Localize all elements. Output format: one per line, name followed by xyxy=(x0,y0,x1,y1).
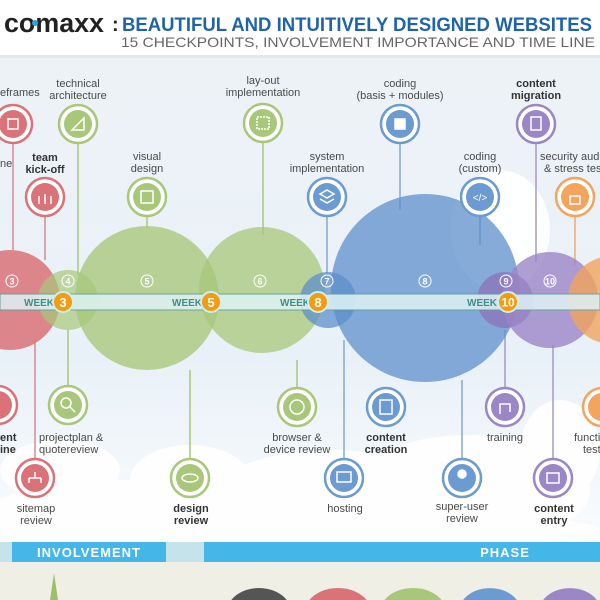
clouds xyxy=(0,170,600,560)
labels: entry xyxy=(541,515,568,527)
labels: coding xyxy=(464,151,496,163)
labels: super-user xyxy=(436,501,489,513)
labels: ne xyxy=(0,158,12,170)
labels: (custom) xyxy=(459,163,501,175)
title: : xyxy=(112,14,119,36)
labels xyxy=(0,75,600,527)
step numbers xyxy=(6,275,556,287)
step numbers: 4 xyxy=(65,276,71,286)
labels: (basis + modules) xyxy=(356,90,444,102)
step numbers: 9 xyxy=(503,276,509,286)
labels: team xyxy=(32,152,58,164)
step numbers: 5 xyxy=(144,276,150,286)
header xyxy=(0,0,600,58)
connector lines xyxy=(13,140,575,462)
labels: review xyxy=(446,513,478,525)
labels: quotereview xyxy=(39,444,98,456)
labels: content xyxy=(366,432,406,444)
labels: browser & xyxy=(272,432,322,444)
week band: WEEK xyxy=(280,298,311,309)
labels: coding xyxy=(384,78,416,90)
labels: review xyxy=(20,515,52,527)
bottom chart xyxy=(0,562,600,600)
labels: lay-out xyxy=(246,75,280,87)
icons xyxy=(0,104,600,497)
step numbers: 10 xyxy=(545,276,555,286)
labels: implementation xyxy=(226,87,300,99)
icons: </> xyxy=(473,193,487,204)
step numbers: 7 xyxy=(324,276,330,286)
labels: ent xyxy=(0,432,17,444)
labels: creation xyxy=(365,444,408,456)
labels: ine xyxy=(0,444,16,456)
labels: kick-off xyxy=(25,164,65,176)
logo: comaxx xyxy=(4,8,104,38)
involvement / phase bar: INVOLVEMENT xyxy=(37,545,141,560)
labels: sitemap xyxy=(17,503,55,515)
phase circles xyxy=(0,194,600,382)
involvement / phase bar: PHASE xyxy=(480,545,530,560)
involvement / phase bar xyxy=(0,542,600,562)
labels: design xyxy=(131,163,163,175)
labels: technical xyxy=(56,78,100,90)
labels: eframes xyxy=(0,87,40,99)
week band: 8 xyxy=(314,295,322,310)
labels: content xyxy=(516,78,556,90)
week band: WEEK xyxy=(24,298,55,309)
labels: review xyxy=(174,515,209,527)
labels: hosting xyxy=(327,503,363,515)
labels: device review xyxy=(264,444,330,456)
labels: design xyxy=(173,503,209,515)
week band: WEEK xyxy=(172,298,203,309)
week band: WEEK xyxy=(467,298,498,309)
labels: migration xyxy=(511,90,561,102)
labels: system xyxy=(310,151,344,163)
step numbers: 6 xyxy=(257,276,263,286)
labels: content xyxy=(534,503,574,515)
week band xyxy=(0,292,600,312)
labels: training xyxy=(487,432,523,444)
labels: architecture xyxy=(49,90,107,102)
week band: 5 xyxy=(207,295,215,310)
labels: implementation xyxy=(290,163,364,175)
week band: 3 xyxy=(59,295,67,310)
week band: 10 xyxy=(501,296,515,310)
step numbers: 8 xyxy=(422,276,428,286)
step numbers: 3 xyxy=(9,276,15,286)
labels: visual xyxy=(133,151,161,163)
labels: projectplan & xyxy=(39,432,104,444)
subtitle: 15 CHECKPOINTS, INVOLVEMENT IMPORTANCE AND TIME LINE xyxy=(121,34,595,50)
